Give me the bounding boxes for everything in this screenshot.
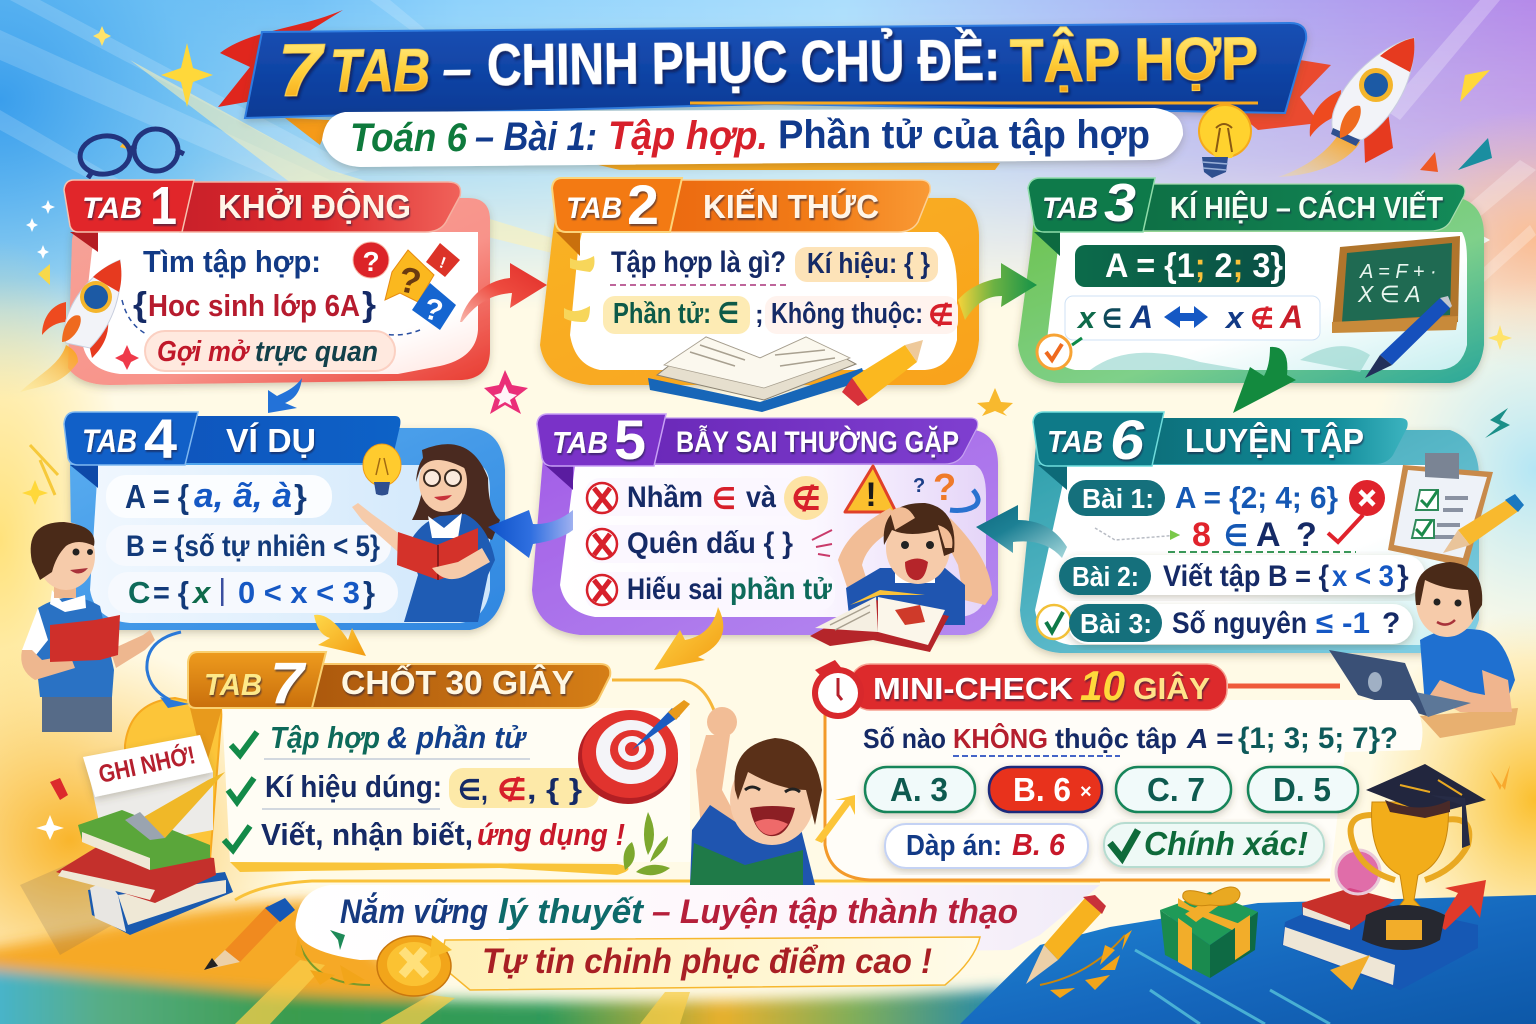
header: VÍ DỤ bbox=[226, 422, 316, 459]
option c bbox=[1116, 767, 1231, 812]
exercise 2: } bbox=[1397, 560, 1409, 593]
option b: × bbox=[1080, 781, 1092, 803]
header bbox=[1033, 408, 1408, 471]
motivational banner bbox=[204, 885, 1132, 998]
header: TAB bbox=[82, 192, 142, 225]
header bbox=[552, 173, 930, 236]
title text bbox=[278, 19, 1258, 112]
header bbox=[850, 662, 1227, 710]
question: 8 in A: 8 bbox=[1192, 516, 1211, 554]
option d bbox=[1248, 767, 1358, 812]
correct bbox=[1104, 823, 1324, 867]
row: misunderstand element: Hiếu sai bbox=[627, 573, 723, 606]
row: write and apply: Viết, nhận biết, bbox=[261, 817, 473, 852]
icon: pen bbox=[1365, 296, 1452, 378]
icon: pencil bbox=[1443, 494, 1524, 553]
panel: tab 3 kí hiệu bbox=[1018, 173, 1484, 383]
text: what is a set: Tập hợp là gì? bbox=[611, 246, 786, 279]
question bbox=[863, 722, 1398, 756]
option d: D. 5 bbox=[1273, 771, 1331, 808]
exercise 2: Bài 2: bbox=[1072, 561, 1139, 592]
question: thuộc tâp bbox=[1055, 723, 1177, 754]
panel frame bbox=[70, 428, 505, 630]
header bbox=[64, 407, 400, 470]
pill: visual hint: Gợi mở bbox=[157, 336, 250, 368]
icon: trophy and books bbox=[1282, 764, 1486, 990]
boy confused bbox=[810, 503, 992, 652]
arrow: tab 5 to tab 4 bbox=[488, 510, 573, 558]
row: misunderstand element bbox=[585, 572, 835, 610]
icon: orange pencil left bbox=[204, 898, 295, 970]
icon: stopwatch bbox=[812, 660, 864, 719]
boy with laptop bbox=[1329, 562, 1518, 738]
title text: – bbox=[442, 36, 472, 99]
header: 7 bbox=[270, 651, 307, 716]
question: 8 in A: ? bbox=[1296, 516, 1317, 554]
banner body bbox=[245, 23, 1306, 118]
pill: element: Phần tử: ∈ bbox=[613, 298, 739, 330]
arrow: tab 2 to tab 3 bbox=[958, 263, 1037, 320]
header: 6 bbox=[1110, 408, 1145, 471]
header bbox=[537, 408, 978, 471]
answer: B. 6 bbox=[1012, 827, 1066, 862]
text: what is a set bbox=[564, 246, 790, 322]
icon: warning bbox=[845, 466, 896, 514]
icon: bulb bbox=[363, 444, 401, 496]
header: TAB bbox=[204, 667, 262, 702]
header: 5 bbox=[614, 408, 646, 471]
row: confusing symbols: ∉ bbox=[791, 480, 821, 517]
line one: Nắm vững bbox=[340, 893, 488, 931]
row: sets and elements: & phần tử bbox=[387, 720, 528, 755]
teacher bbox=[352, 444, 500, 622]
header: TAB bbox=[566, 192, 622, 225]
panel: mini-check bbox=[812, 660, 1422, 880]
panel frame bbox=[1020, 430, 1479, 653]
ribbon tails bbox=[218, 10, 1331, 145]
up arrow bbox=[1438, 880, 1486, 930]
question: KHÔNG bbox=[953, 722, 1048, 754]
icon: chalkboard: A = F + · bbox=[1359, 261, 1437, 283]
header: KHỞI ĐỘNG bbox=[218, 187, 411, 225]
question: A = bbox=[1186, 723, 1233, 754]
pill: element: ; bbox=[755, 299, 764, 329]
title text: 7 bbox=[278, 29, 327, 112]
icon: question marks bbox=[913, 467, 978, 510]
subtitle pill: – Bài 1: bbox=[475, 115, 597, 159]
pill: set a: } bbox=[294, 478, 307, 515]
panel: tab 6 luyện tập bbox=[1020, 408, 1524, 738]
pill: notation: A bbox=[1129, 299, 1153, 335]
header: LUYỆN TẬP bbox=[1185, 422, 1364, 459]
answer bbox=[885, 824, 1088, 868]
panel: tab 5 bẫy sai bbox=[532, 408, 998, 652]
pill: visual hint: trực quan bbox=[255, 336, 378, 368]
icon: glasses bbox=[78, 126, 184, 178]
arrow: blue curve to tab 7 bbox=[147, 632, 189, 708]
row: correct symbols: ∈, bbox=[458, 775, 488, 807]
exercise 3: ? bbox=[1382, 607, 1400, 640]
row: write and apply bbox=[224, 817, 625, 852]
arrow: tab 5 to tab 7 bbox=[654, 607, 723, 670]
row: confusing symbols: ∈ bbox=[712, 483, 736, 516]
icon: laurel right bbox=[1040, 930, 1132, 998]
pill: not belonging: ∉ bbox=[928, 300, 954, 332]
icon: question marks: ? bbox=[913, 475, 925, 497]
student with book bbox=[21, 522, 155, 732]
header: 10 bbox=[1080, 662, 1125, 709]
pill: notation: ∈ bbox=[1102, 304, 1122, 334]
decorative wave in panel 3 bbox=[1090, 346, 1370, 372]
icon: check badge bbox=[1037, 335, 1082, 369]
option b bbox=[989, 767, 1102, 812]
exercise 2 bbox=[1059, 555, 1425, 595]
header: 3 bbox=[1104, 173, 1136, 233]
trophy bbox=[1351, 802, 1469, 950]
correct: Chính xác! bbox=[1144, 825, 1308, 862]
stack of books with note bbox=[56, 735, 233, 935]
arrow: tab 1 to tab 2 bbox=[460, 263, 547, 322]
subtitle pill bbox=[322, 108, 1183, 170]
pill: set c: x bbox=[191, 575, 212, 610]
exercise 2: x < 3 bbox=[1332, 560, 1394, 593]
icon: chalkboard bbox=[1332, 236, 1460, 333]
header: GIÂY bbox=[1133, 670, 1210, 706]
pill: set a: a, ã, à bbox=[194, 477, 292, 515]
icon: question marks: ? bbox=[395, 258, 425, 303]
option c: C. 7 bbox=[1147, 771, 1205, 808]
set example: } bbox=[362, 286, 376, 324]
exercise 3: Bài 3: bbox=[1080, 608, 1152, 639]
line two: Tự tin chinh phục điểm cao ! bbox=[482, 942, 932, 981]
header: MINI-CHECK bbox=[873, 671, 1074, 706]
icon: leaves bbox=[624, 812, 670, 875]
header: BẪY SAI THƯỜNG GẶP bbox=[676, 425, 959, 459]
exercise 3: Số nguyên bbox=[1172, 607, 1307, 640]
title text: TẬP HỢP bbox=[1010, 25, 1258, 94]
row: sets and elements bbox=[231, 720, 530, 759]
answer: Dàp án: bbox=[906, 830, 1002, 862]
arrow: tab 1 to tab 4 bbox=[268, 378, 302, 413]
graduation cap bbox=[1366, 764, 1486, 848]
title text: TAB bbox=[330, 37, 430, 105]
row: correct symbols: ∉ bbox=[497, 774, 527, 807]
arrow: tab 3 to tab 6 bbox=[1233, 347, 1296, 413]
icon: pencil right bbox=[1026, 895, 1106, 984]
icon: question marks: ? bbox=[933, 467, 956, 509]
cheering boy bbox=[690, 707, 822, 885]
row: correct symbols: Kí hiệu dúng: bbox=[265, 769, 442, 804]
icon: gift box bbox=[1160, 887, 1258, 978]
panel: tab 2 kiến thức bbox=[540, 173, 979, 412]
row: misunderstand element: phần tử bbox=[730, 573, 832, 606]
option b: B. 6 bbox=[1013, 771, 1071, 808]
row: write and apply: ứng dụng ! bbox=[477, 817, 625, 852]
header bbox=[64, 176, 460, 236]
row: sets and elements: Tập hợp bbox=[270, 720, 380, 755]
books bbox=[1282, 888, 1478, 990]
panel: tab 7 chốt 30 giây bbox=[56, 651, 822, 935]
row: confusing symbols: Nhầm bbox=[627, 481, 703, 514]
header: CHỐT 30 GIÂY bbox=[341, 663, 574, 701]
sparkles and confetti bbox=[22, 26, 1512, 840]
panel frame bbox=[125, 680, 716, 875]
set example: { bbox=[133, 286, 147, 324]
header: KIẾN THỨC bbox=[703, 188, 879, 225]
icon: coin bbox=[377, 935, 452, 996]
panel frame bbox=[540, 198, 979, 385]
exercise 3 bbox=[1037, 604, 1413, 644]
option a: A. 3 bbox=[890, 771, 948, 808]
panel: tab 4 ví dụ bbox=[21, 407, 505, 732]
row: forgot brackets bbox=[585, 525, 832, 563]
header bbox=[1028, 173, 1465, 233]
title text: CHINH PHỤC CHỦ ĐỀ: bbox=[487, 28, 1000, 98]
panel frame bbox=[532, 430, 998, 635]
icon: clipboard bbox=[1388, 453, 1493, 567]
icon: question marks: ! bbox=[437, 255, 448, 272]
question: {1; 3; 5; 7}? bbox=[1238, 722, 1398, 755]
icon: chalkboard: X ∈ A bbox=[1357, 281, 1421, 307]
pill: symbol: Kí hiệu: { } bbox=[807, 248, 930, 280]
header: TAB bbox=[1047, 424, 1103, 459]
pill: notation bbox=[1065, 296, 1320, 340]
icon: question marks: ? bbox=[362, 246, 380, 277]
header: 4 bbox=[144, 407, 177, 470]
question: 8 in A bbox=[1095, 516, 1356, 554]
icon: open book bbox=[648, 337, 866, 412]
header: 1 bbox=[150, 176, 177, 236]
pill: set c bbox=[108, 572, 398, 613]
exercise 1 bbox=[1068, 480, 1385, 542]
pill: not belonging: Không thuộc: bbox=[771, 298, 923, 330]
row: forgot brackets: Quên dấu { } bbox=[627, 527, 793, 560]
pill: set a: A = {1; 2; 3} bbox=[1105, 247, 1283, 285]
pill: set b: B = {số tự nhiên < 5} bbox=[126, 530, 380, 563]
arrow: tab 4 to tab 7 bbox=[314, 615, 366, 656]
header bbox=[188, 651, 610, 716]
icon: rocket bbox=[20, 260, 121, 392]
curved arrows near boy bbox=[815, 795, 855, 843]
icon: light bulb top bbox=[1199, 105, 1251, 178]
pill: set c: 0 < x < 3 bbox=[238, 575, 360, 610]
icon: target bbox=[578, 700, 690, 804]
pill: notation: x bbox=[1224, 300, 1245, 335]
panel: tab 1 khởi động bbox=[20, 176, 490, 392]
icon: warning: ! bbox=[865, 476, 877, 514]
main title banner bbox=[218, 10, 1331, 145]
set example: Hoc sinh lớp 6A bbox=[148, 288, 360, 323]
icon: pencil bbox=[842, 340, 923, 406]
header: TAB bbox=[82, 423, 137, 459]
pill: set c: = { bbox=[153, 575, 189, 610]
row: confusing symbols bbox=[585, 476, 828, 520]
row: confusing symbols: và bbox=[746, 481, 776, 514]
header: TAB bbox=[1042, 192, 1098, 225]
panel frame bbox=[68, 198, 490, 385]
header: TAB bbox=[552, 425, 608, 460]
subtitle pill: Phần tử của tập hợp bbox=[778, 113, 1150, 157]
icon: question marks bbox=[353, 242, 460, 330]
pill: set b bbox=[106, 525, 391, 566]
line one bbox=[296, 885, 1100, 960]
subtitle pill: Tập hợp. bbox=[608, 114, 768, 158]
icon: laurel bbox=[295, 930, 370, 985]
icon: rocket top right bbox=[1278, 38, 1414, 177]
pill: set a: A = { bbox=[125, 478, 189, 515]
glass ball bbox=[1336, 850, 1380, 894]
pill: set c: C bbox=[128, 575, 150, 610]
row: correct symbols bbox=[228, 768, 599, 809]
subtitle pill: Toán 6 bbox=[350, 116, 468, 160]
arrow: tab 6 to tab 5 bbox=[976, 505, 1067, 558]
pill: notation: ∉ bbox=[1250, 303, 1274, 334]
row: correct symbols: , { } bbox=[527, 774, 582, 806]
line two bbox=[440, 937, 980, 990]
exercise 2: Viết tập B = { bbox=[1163, 560, 1329, 593]
exercise 1: A = {2; 4; 6} bbox=[1175, 480, 1338, 515]
exercise 3: ≤ -1 bbox=[1316, 607, 1370, 640]
header: 2 bbox=[627, 173, 659, 236]
pill: set a bbox=[106, 475, 332, 518]
line one: – Luyện tập thành thạo bbox=[652, 893, 1018, 931]
option a bbox=[865, 767, 975, 812]
panel frame bbox=[825, 686, 1422, 880]
text: find the set: Tìm tập hợp: bbox=[143, 244, 321, 279]
pill: notation: x bbox=[1076, 300, 1097, 335]
set example bbox=[122, 286, 420, 335]
question: 8 in A: A bbox=[1256, 516, 1281, 554]
exercise 1: Bài 1: bbox=[1082, 483, 1154, 514]
question: 8 in A: ∈ bbox=[1224, 520, 1248, 553]
question: Số nào bbox=[863, 723, 946, 754]
stack of books with note: GHI NHỚ! bbox=[96, 739, 198, 789]
pill: set c: } bbox=[363, 575, 375, 610]
pill: notation: A bbox=[1279, 299, 1303, 335]
icon: question marks: ? bbox=[420, 292, 446, 329]
panel frame bbox=[1018, 198, 1484, 383]
line one: lý thuyết bbox=[498, 893, 645, 931]
header: KÍ HIỆU – CÁCH VIẾT bbox=[1170, 189, 1443, 225]
pill: visual hint bbox=[145, 331, 395, 371]
